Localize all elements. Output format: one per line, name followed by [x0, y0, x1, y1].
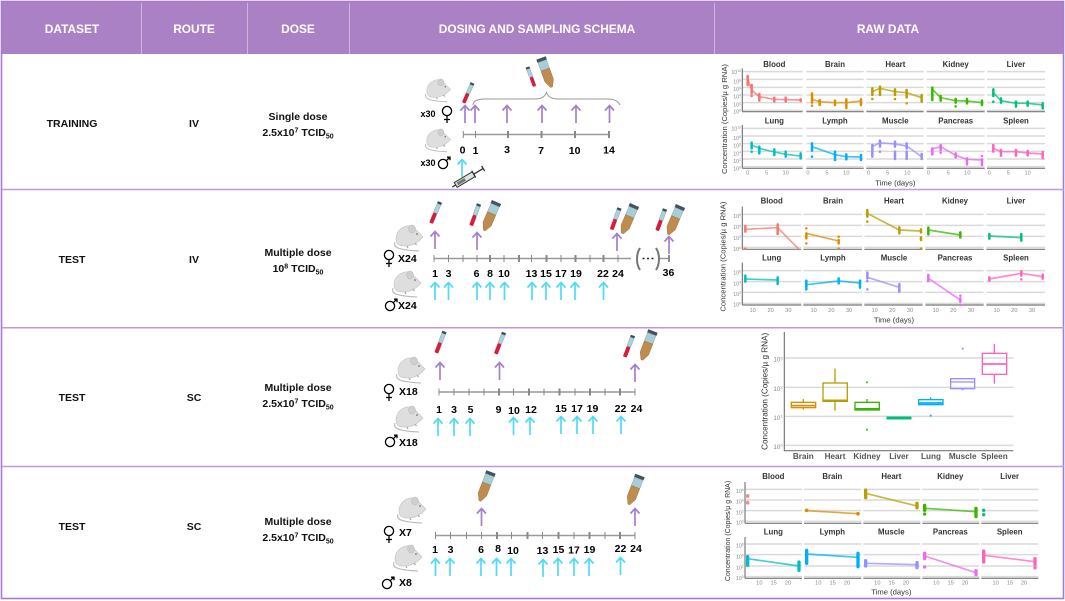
timeline: 17	[555, 268, 567, 280]
icon: sample tubes	[462, 56, 556, 104]
timeline: 19	[587, 403, 598, 415]
chart: row 2 organ time courses	[718, 197, 1045, 325]
table header bar: ROUTE	[173, 22, 215, 36]
chart: row 2 organ time courses: 10	[733, 236, 739, 242]
chart: row 4 organ time courses: 10	[736, 521, 742, 527]
timeline: 6	[478, 544, 484, 556]
timeline: 13	[526, 268, 537, 280]
chart: row 2 organ time courses: 10	[733, 303, 739, 309]
chart: row 2 organ time courses: Time (days)	[874, 316, 915, 325]
chart: row 4 organ time courses: Time (days)	[871, 588, 912, 597]
chart: row 4 organ time courses: Heart	[881, 472, 902, 481]
chart: row 3 box plot: Liver	[889, 452, 910, 461]
chart: row 1 organ time courses: Lung	[765, 117, 784, 126]
chart: row 2 organ time courses: 6	[739, 269, 741, 273]
chart: row 4 organ time courses: 15	[948, 581, 954, 587]
timeline: 10	[569, 145, 581, 157]
chart: row 4 organ time courses: 20	[1021, 581, 1027, 587]
brace	[473, 92, 620, 105]
chart: row 4 organ time courses: 10	[736, 566, 742, 572]
chart: row 4 organ time courses: 20	[785, 581, 791, 587]
chart: row 4 organ time courses: 10	[756, 581, 762, 587]
chart: row 1 organ time courses: 10	[733, 95, 739, 101]
timeline: 17	[568, 544, 580, 556]
chart: row 2 organ time courses: 30	[968, 308, 974, 314]
chart: row 4 organ time courses: 10	[736, 510, 742, 516]
icon: mice: X7	[399, 527, 412, 539]
timeline: 1	[436, 404, 442, 416]
chart: row 4 organ time courses: Kidney	[937, 472, 964, 481]
chart: row 1 organ time courses: 2	[739, 101, 741, 105]
timeline: 15	[553, 544, 564, 556]
icon: mice	[384, 225, 423, 312]
schema: row 3 multiple dose SC	[384, 329, 658, 449]
row 3 labels: test SC: TCID	[298, 398, 326, 410]
row 1 labels: training IV: TCID	[298, 127, 326, 139]
timeline: 19	[584, 544, 595, 556]
table header bar: RAW DATA	[857, 22, 920, 36]
timeline: 3	[451, 404, 457, 416]
chart: row 1 organ time courses: Liver	[1007, 60, 1025, 69]
timeline	[432, 255, 674, 280]
chart: row 1 organ time courses: 10	[733, 151, 739, 157]
chart: row 4 organ time courses: Muscle	[878, 527, 905, 536]
chart: row 3 box plot: 10	[773, 415, 780, 422]
schema: row 1 single dose	[420, 56, 620, 190]
chart: row 3 box plot: 0	[780, 443, 783, 448]
schema: row 2 multiple dose IV	[384, 200, 685, 312]
chart: row 2 organ time courses: Concentration (Copies/µ g RNA)	[718, 201, 727, 312]
chart: row 4 organ time courses: 4	[742, 553, 744, 557]
row 1 labels: training IV: 50	[326, 134, 334, 140]
row 1 labels: training IV: 2.5x10	[262, 127, 294, 139]
chart: row 4 organ time courses: 10	[736, 489, 742, 495]
chart: row 4 organ time courses: Concentration (Copies/µ g RNA)	[725, 481, 732, 581]
chart: row 1 organ time courses: 10	[964, 171, 970, 177]
row 4 labels: test SC: 2.5x10	[262, 532, 294, 544]
table header bar: DOSING AND SAMPLING SCHEMA	[439, 22, 636, 36]
chart: row 3 box plot: Brain	[793, 452, 814, 461]
chart: row 2 organ time courses: 10	[933, 308, 939, 314]
row 3 labels: test SC	[59, 382, 334, 412]
row 2 labels: test IV: Multiple dose	[264, 247, 332, 259]
chart: row 4 organ time courses: 10	[815, 581, 821, 587]
chart: row 1 organ time courses: Concentration (Copies/µ g RNA)	[720, 64, 729, 174]
chart: row 3 box plot: 3	[780, 355, 783, 360]
chart: row 1 organ time courses: 4	[739, 150, 741, 154]
schema: row 4 multiple dose SC	[382, 470, 645, 589]
timeline: 5	[468, 404, 474, 416]
timeline: 17	[571, 403, 583, 415]
chart: row 2 organ time courses: 10	[811, 308, 817, 314]
chart: row 1 organ time courses: Pancreas	[938, 117, 974, 126]
timeline: 1	[432, 268, 438, 280]
chart: row 1 organ time courses: 10	[733, 166, 739, 172]
chart: row 4 organ time courses	[725, 472, 1038, 597]
chart: row 4 organ time courses: Liver	[1000, 472, 1019, 481]
row 4 labels: test SC: 7	[294, 532, 298, 540]
chart: row 1 organ time courses: 0	[988, 171, 991, 177]
chart: row 3 box plot: 10	[773, 444, 780, 451]
row 4 labels: test SC: SC	[187, 521, 202, 533]
chart: row 2 organ time courses: 2	[739, 291, 741, 295]
chart: row 4 organ time courses: 10	[993, 581, 999, 587]
chart: row 3 box plot: 1	[780, 414, 783, 419]
chart: row 1 organ time courses: 10	[733, 159, 739, 165]
row 1 labels: training IV: TRAINING	[47, 118, 97, 130]
chart: row 2 organ time courses: Spleen	[1003, 253, 1029, 262]
chart: row 4 organ time courses: 10	[736, 554, 742, 560]
timeline: 13	[537, 545, 548, 557]
timeline: 10	[498, 268, 510, 280]
timeline: 1	[473, 145, 479, 157]
dosing and sampling arrows	[434, 362, 640, 436]
chart: row 4 organ time courses: 2	[742, 509, 744, 513]
chart: row 4 organ time courses: 15	[1007, 581, 1013, 587]
row 1 labels: training IV: IV	[189, 118, 199, 130]
chart: row 1 organ time courses: 10	[783, 171, 789, 177]
row 2 labels: test IV: TCID	[288, 263, 316, 275]
chart: row 4 organ time courses: 15	[771, 581, 777, 587]
timeline	[436, 388, 642, 417]
chart: row 2 organ time courses: 10	[733, 292, 739, 298]
timeline: 7	[538, 145, 544, 157]
chart: row 2 organ time courses: 10	[733, 270, 739, 276]
row 2 labels: test IV: 8	[284, 264, 288, 270]
dosing and sampling arrows	[431, 508, 640, 577]
chart: row 4 organ time courses: 10	[736, 500, 742, 506]
chart: row 1 organ time courses: 5	[765, 171, 768, 177]
chart: row 1 organ time courses: 10	[843, 171, 849, 177]
chart: row 1 organ time courses: 10	[737, 126, 741, 130]
chart: row 2 organ time courses: 10	[733, 247, 739, 253]
chart: row 1 organ time courses: 10	[733, 144, 739, 150]
timeline: 8	[495, 543, 501, 555]
chart: row 2 organ time courses: 30	[907, 308, 913, 314]
timeline: 12	[525, 404, 537, 416]
chart: row 2 organ time courses: 30	[785, 308, 791, 314]
row 3 labels: test SC: SC	[187, 392, 202, 404]
chart: row 2 organ time courses: 20	[889, 308, 895, 314]
chart: row 2 organ time courses: 10	[733, 281, 739, 287]
chart: row 4 organ time courses: 10	[874, 581, 880, 587]
row 4 labels: test SC: TCID	[298, 532, 326, 544]
chart: row 4 organ time courses: Lung	[764, 527, 783, 536]
row 1 labels: training IV	[47, 111, 334, 140]
chart: row 1 organ time courses: Brain	[825, 60, 845, 69]
row 4 labels: test SC: Multiple dose	[264, 516, 332, 528]
timeline: 24	[630, 543, 642, 555]
icon: mice	[420, 79, 452, 169]
chart: row 1 organ time courses: 2	[739, 158, 741, 162]
chart: row 4 organ time courses: Spleen	[997, 527, 1023, 536]
row 1 labels: training IV: Single dose	[269, 111, 328, 123]
ellipsis bracket	[637, 248, 659, 270]
timeline: 14	[603, 144, 615, 156]
row 3 labels: test SC: 50	[326, 404, 334, 412]
chart: row 4 organ time courses: 4	[742, 499, 744, 503]
timeline	[432, 532, 642, 557]
chart: row 2 organ time courses: 10	[750, 308, 756, 314]
chart: row 4 organ time courses: 10	[736, 576, 742, 582]
chart: row 2 organ time courses: Lung	[762, 253, 781, 262]
chart: row 1 organ time courses: 0	[746, 171, 749, 177]
icon: mice: X8	[399, 577, 412, 589]
chart: row 3 box plot: 10	[773, 386, 780, 393]
chart: row 1 organ time courses: 10	[733, 136, 739, 142]
chart: row 4 organ time courses: 6	[742, 488, 744, 492]
row 2 labels: test IV: 10	[273, 263, 284, 275]
timeline: 19	[570, 268, 582, 280]
chart: row 2 organ time courses: 10	[994, 308, 1000, 314]
chart: row 2 organ time courses: 2	[739, 235, 741, 239]
timeline: 0	[460, 144, 466, 156]
chart: row 1 organ time courses: 0	[927, 171, 930, 177]
chart: row 4 organ time courses: 0	[742, 575, 744, 579]
timeline: 15	[540, 268, 552, 280]
timeline: 24	[612, 268, 624, 280]
chart: row 2 organ time courses: Muscle	[881, 253, 908, 262]
chart: row 1 organ time courses: 10	[733, 87, 739, 93]
chart: row 1 organ time courses: 10	[904, 171, 910, 177]
timeline: 24	[631, 403, 642, 415]
chart: row 3 box plot: Heart	[825, 452, 846, 461]
chart: row 3 box plot: Concentration (Copies/µ g RNA)	[760, 332, 769, 450]
chart: row 1 organ time courses: 10	[1025, 171, 1031, 177]
chart: row 1 organ time courses: 10	[733, 102, 739, 108]
chart: row 2 organ time courses: 30	[1029, 308, 1035, 314]
icon: mice: X18	[399, 386, 418, 398]
row 3 labels: test SC: TEST	[59, 392, 86, 404]
chart: row 1 organ time courses: Muscle	[882, 117, 909, 126]
row 3 labels: test SC: 2.5x10	[262, 398, 294, 410]
icon: mice: X24	[398, 253, 417, 265]
chart: row 1 organ time courses: Blood	[763, 60, 786, 69]
chart: row 1 organ time courses: 6	[739, 86, 741, 90]
chart: row 3 box plot: Muscle	[949, 452, 977, 461]
chart: row 1 organ time courses: 0	[806, 171, 810, 177]
timeline: 1	[432, 544, 438, 556]
chart: row 4 organ time courses: 2	[742, 565, 744, 569]
chart: row 1 organ time courses: 8	[739, 135, 741, 139]
chart: row 1 organ time courses: 5	[886, 171, 889, 177]
chart: row 3 box plot: Kidney	[853, 452, 881, 461]
chart: row 2 organ time courses: 20	[768, 308, 774, 314]
timeline: 3	[446, 268, 452, 280]
chart: row 1 organ time courses: Kidney	[943, 60, 969, 69]
chart: row 1 organ time courses: 8	[739, 78, 741, 82]
chart: row 1 organ time courses: 10	[733, 79, 739, 85]
chart: row 4 organ time courses: 0	[742, 520, 744, 524]
icon: sample tubes	[429, 200, 685, 236]
row 2 labels: test IV	[59, 247, 332, 276]
icon: mice: x30	[420, 109, 436, 119]
chart: row 2 organ time courses: Pancreas	[938, 253, 973, 262]
row 3 labels: test SC: 7	[294, 398, 298, 406]
icon: syringe	[450, 165, 485, 190]
chart: row 3 box plot: Spleen	[981, 452, 1008, 461]
row 4 labels: test SC: 50	[326, 538, 334, 546]
row 2 labels: test IV: 50	[316, 270, 324, 276]
chart: row 4 organ time courses: 6	[742, 543, 744, 547]
sampling arrows	[458, 106, 614, 177]
chart: row 2 organ time courses: 20	[950, 308, 956, 314]
chart: row 2 organ time courses: 0	[739, 302, 741, 306]
chart: row 4 organ time courses: 15	[830, 581, 836, 587]
chart: row 2 organ time courses: Kidney	[942, 197, 969, 206]
row 2 labels: test IV: TEST	[59, 254, 86, 266]
icon: mice: X18	[399, 437, 418, 449]
chart: row 2 organ time courses: Brain	[823, 197, 843, 206]
chart: row 1 organ time courses: Spleen	[1003, 117, 1029, 126]
row 4 labels: test SC	[59, 516, 334, 546]
chart: row 1 organ time courses: 10	[731, 127, 737, 133]
chart: row 4 organ time courses: Pancreas	[933, 527, 968, 536]
chart: row 2 organ time courses: 4	[739, 224, 741, 228]
icon: sample tubes	[434, 329, 658, 362]
chart: row 2 organ time courses: Blood	[761, 197, 783, 206]
timeline: 22	[615, 543, 626, 555]
chart: row 4 organ time courses: Blood	[762, 472, 785, 481]
chart: row 2 organ time courses: 10	[872, 308, 878, 314]
chart: row 2 organ time courses: 4	[739, 280, 741, 284]
chart: row 1 organ time courses: 5	[1007, 171, 1010, 177]
table header bar: DOSE	[281, 22, 315, 36]
chart: row 2 organ time courses: Heart	[884, 197, 904, 206]
chart: row 2 organ time courses: 6	[739, 213, 741, 217]
icon: mice: x30	[420, 158, 436, 168]
chart: row 4 organ time courses: Lymph	[820, 527, 845, 536]
chart: row 3 box plot: 2	[780, 385, 783, 390]
chart: row 1 organ time courses	[720, 60, 1045, 188]
chart: row 2 organ time courses: 10	[733, 225, 739, 231]
chart: row 1 organ time courses: 0	[867, 171, 870, 177]
chart: row 1 organ time courses: 6	[739, 143, 741, 147]
chart: row 2 organ time courses: 20	[1011, 308, 1017, 314]
icon: mice	[384, 357, 425, 449]
table header bar: DATASET	[45, 22, 100, 36]
timeline: 22	[615, 403, 626, 415]
chart: row 4 organ time courses: 20	[903, 581, 909, 587]
row 2 labels: test IV: IV	[189, 254, 199, 266]
chart: row 1 organ time courses: 0	[739, 165, 741, 169]
chart: row 2 organ time courses: Liver	[1007, 197, 1025, 206]
table header bar	[2, 2, 1064, 54]
row 1 labels: training IV: 7	[294, 128, 298, 134]
chart: row 2 organ time courses: Lymph	[820, 253, 846, 262]
timeline	[460, 131, 615, 157]
chart: row 1 organ time courses: 10	[737, 69, 741, 73]
timeline: 15	[555, 403, 567, 415]
chart: row 3 box plot: 10	[773, 357, 780, 364]
chart: row 1 organ time courses: 0	[739, 109, 741, 113]
chart: row 2 organ time courses: 20	[828, 308, 834, 314]
timeline: 9	[496, 404, 502, 416]
chart: row 4 organ time courses: 20	[844, 581, 850, 587]
chart: row 2 organ time courses: 30	[846, 308, 852, 314]
icon: mice: X24	[398, 300, 417, 312]
chart: row 3 box plot	[760, 332, 1013, 461]
timeline: 6	[474, 268, 480, 280]
timeline: 10	[507, 545, 519, 557]
chart: row 4 organ time courses: 10	[933, 581, 939, 587]
chart: row 1 organ time courses: 10	[731, 70, 737, 76]
timeline: 3	[504, 144, 510, 156]
chart: row 1 organ time courses: Lymph	[822, 117, 848, 126]
timeline: 8	[487, 268, 493, 280]
timeline: 3	[448, 544, 454, 556]
chart: row 1 organ time courses: Heart	[885, 60, 906, 69]
icon: mice	[382, 497, 426, 589]
timeline: 22	[597, 268, 609, 280]
chart: row 4 organ time courses: Brain	[822, 472, 843, 481]
icon: sample tubes	[475, 470, 645, 506]
chart: row 1 organ time courses: 4	[739, 94, 741, 98]
timeline: 36	[663, 267, 674, 279]
chart: row 1 organ time courses: 5	[947, 171, 950, 177]
chart: row 2 organ time courses: 0	[739, 246, 741, 250]
chart: row 1 organ time courses: Time (days)	[875, 179, 916, 188]
dosing and sampling arrows	[430, 232, 674, 300]
chart: row 4 organ time courses: 20	[962, 581, 968, 587]
row 4 labels: test SC: TEST	[59, 521, 86, 533]
chart: row 1 organ time courses: 5	[825, 171, 829, 177]
chart: row 2 organ time courses: 10	[733, 214, 739, 220]
row 3 labels: test SC: Multiple dose	[264, 382, 332, 394]
chart: row 1 organ time courses: 10	[733, 110, 739, 116]
timeline: 10	[508, 405, 520, 417]
chart: row 3 box plot: Lung	[921, 452, 941, 461]
chart: row 4 organ time courses: 15	[889, 581, 895, 587]
chart: row 4 organ time courses: 10	[736, 544, 742, 550]
